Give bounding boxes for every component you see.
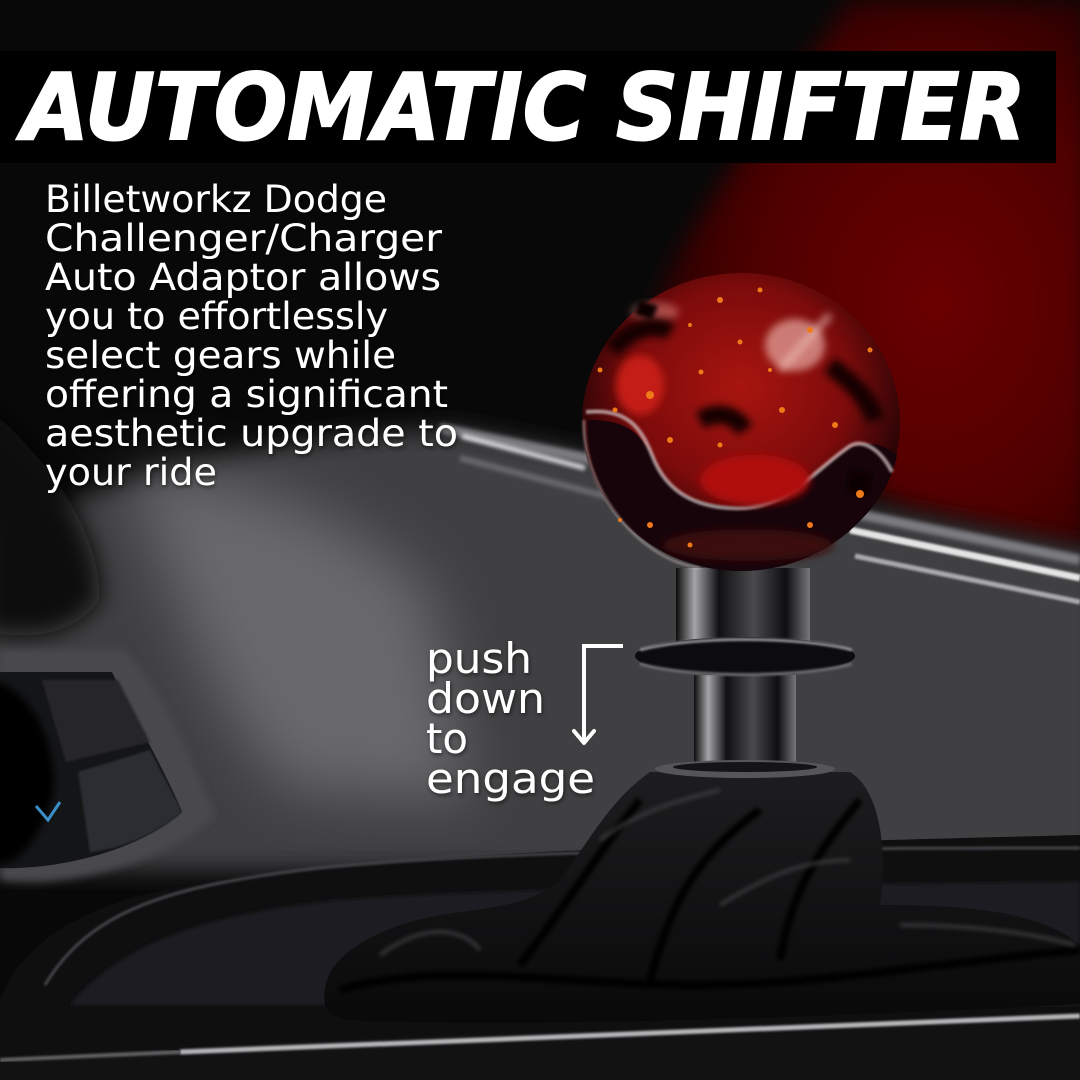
description text: offering a significant bbox=[45, 373, 448, 416]
console tray bbox=[0, 835, 1080, 1080]
description text: aesthetic upgrade to bbox=[45, 412, 458, 455]
push down to engage label bbox=[426, 634, 595, 803]
gear boot bbox=[324, 772, 1080, 1023]
description text bbox=[45, 178, 458, 494]
dashboard button panel bbox=[0, 650, 215, 882]
title banner: AUTOMATIC SHIFTER bbox=[16, 54, 1026, 161]
description text: Challenger/Charger bbox=[45, 217, 443, 260]
push down to engage label: down bbox=[426, 674, 545, 723]
chrome shaft and collar bbox=[635, 568, 855, 778]
arrow: push down bbox=[574, 646, 623, 743]
description text: select gears while bbox=[45, 334, 396, 377]
push down to engage label: to bbox=[426, 714, 468, 763]
push down to engage label: engage bbox=[426, 754, 595, 803]
description text: you to effortlessly bbox=[45, 295, 388, 338]
chrome trim stripes bbox=[440, 428, 1080, 560]
description text: your ride bbox=[45, 451, 217, 494]
description text: Billetworkz Dodge bbox=[45, 178, 387, 221]
description text: Auto Adaptor allows bbox=[45, 256, 441, 299]
push down to engage label: push bbox=[426, 634, 532, 683]
shift knob ball bbox=[582, 273, 900, 571]
